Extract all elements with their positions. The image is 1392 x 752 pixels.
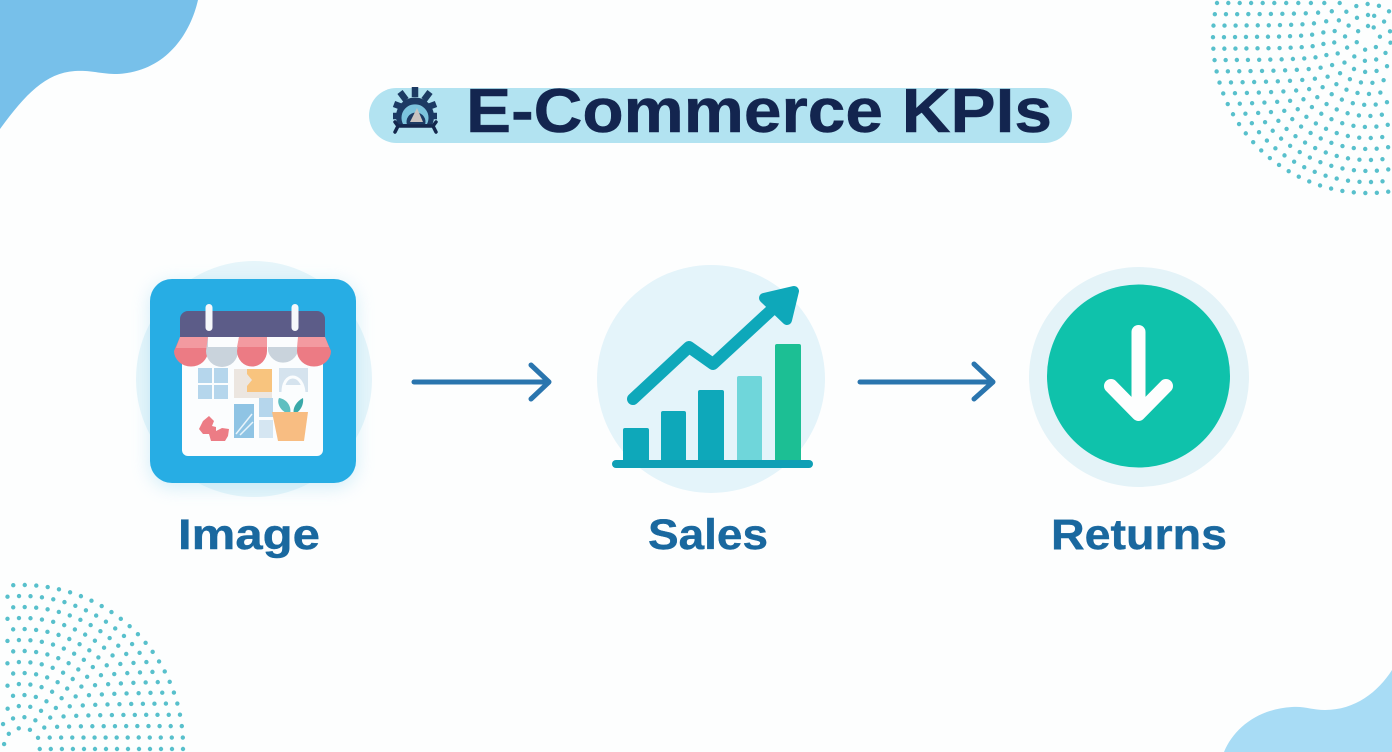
decorative blob: top left [0, 0, 198, 129]
label: Returns: Returns [1051, 511, 1227, 559]
title banner [369, 77, 1072, 146]
bar chart [612, 344, 813, 468]
product: red shoe [199, 416, 229, 441]
icon: blue tile [150, 279, 356, 483]
store awning [174, 337, 331, 367]
halo circle [1029, 267, 1249, 487]
icon shadow [150, 283, 356, 487]
panel: image [136, 261, 372, 497]
store body [182, 337, 323, 456]
decorative dot field: bottom left [3, 585, 183, 749]
halo circle [136, 261, 372, 497]
product: bag tile [279, 368, 308, 392]
panel: returns [1029, 267, 1249, 487]
calendar rings [206, 304, 298, 331]
calendar header [180, 311, 325, 337]
arrow: sales to returns [860, 364, 993, 399]
title pill background [369, 88, 1072, 143]
arrow: image to sales [414, 365, 549, 399]
panel: sales [597, 265, 825, 493]
decorative dot field: top right [1213, 3, 1391, 193]
label: Sales: Sales [648, 511, 768, 559]
store window [198, 368, 228, 399]
product: mirror [234, 404, 254, 438]
icon: gear with house [393, 87, 437, 132]
halo circle [597, 265, 825, 493]
icon: down arrow [1111, 332, 1166, 414]
trend arrow [633, 291, 794, 399]
product tiles [259, 398, 273, 438]
product: apparel tile [234, 369, 272, 398]
title text: E-Commerce KPIs [466, 77, 1052, 146]
product: basket with leaves [272, 398, 308, 441]
gear base bar [395, 122, 436, 132]
green disc [1047, 284, 1230, 468]
decorative blob: bottom right [1224, 670, 1392, 752]
label: Image: Image [178, 511, 320, 559]
